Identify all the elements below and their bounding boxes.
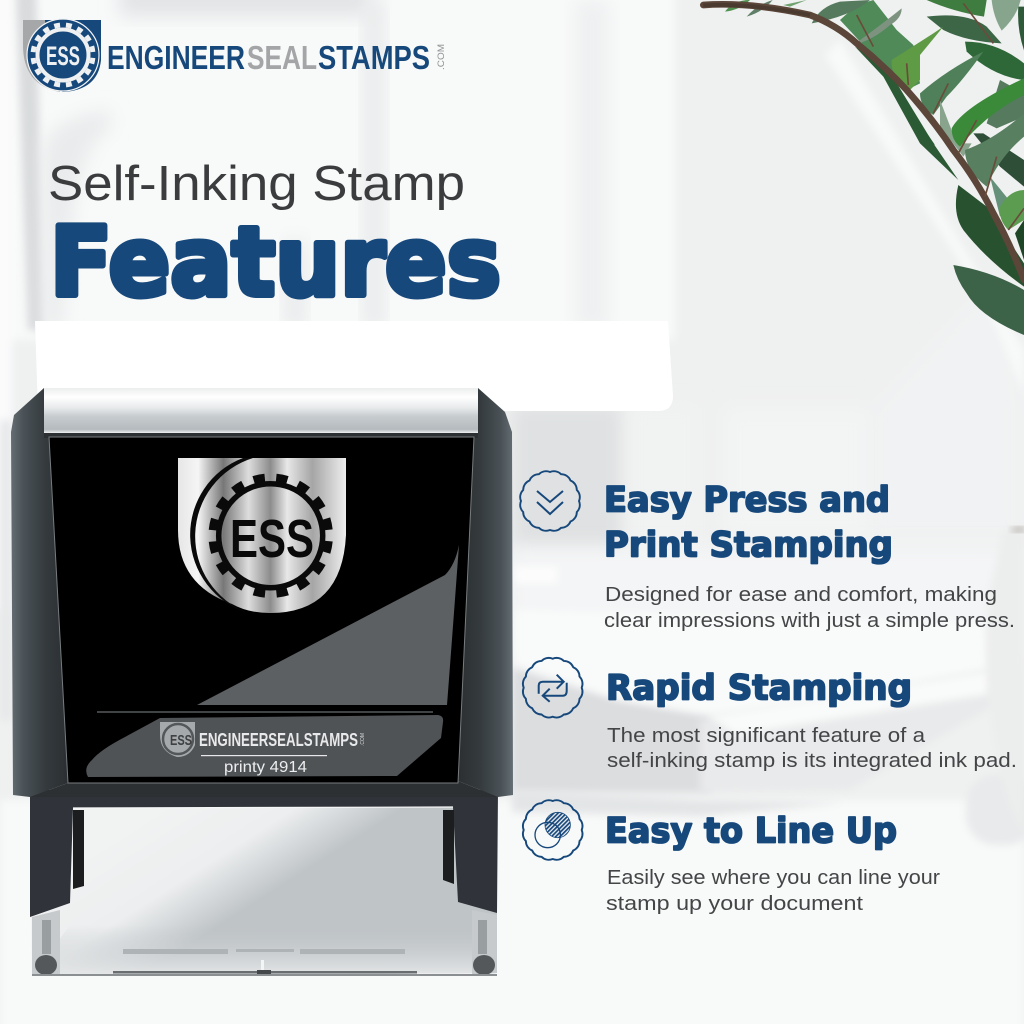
small brand label — [160, 722, 366, 776]
description: The most significant feature of a — [607, 725, 926, 747]
logo shield — [23, 19, 101, 92]
logo: Engineer Seal Stamps — [23, 19, 446, 92]
small brand label: printy 4914 — [224, 759, 307, 776]
logo wordmark — [107, 39, 446, 76]
description: Easily see where you can line your — [607, 867, 940, 889]
clear stamp base — [30, 800, 497, 976]
icon: double chevron — [520, 471, 580, 531]
description — [607, 725, 1017, 772]
grey housing shell — [11, 388, 513, 797]
heading: Easy to Line Up — [605, 812, 897, 852]
description: clear impressions with just a simple press. — [604, 610, 1015, 632]
feature: Easy Press and Print Stamping — [520, 471, 1015, 632]
silver top strip — [44, 388, 478, 433]
small brand label: ENGINEERSEALSTAMPS — [199, 730, 358, 750]
heading: Rapid Stamping — [606, 668, 912, 708]
white monitor panel — [35, 321, 673, 411]
description: stamp up your document — [606, 893, 864, 915]
panel reflection lower — [86, 715, 443, 777]
logo shield: ESS — [46, 41, 80, 71]
feature: Rapid Stamping — [523, 658, 1017, 772]
logo wordmark: SEAL — [247, 39, 317, 76]
heading line two: Print Stamping — [604, 526, 893, 566]
icon: repeat arrows — [523, 658, 583, 718]
title line: Features: Features — [50, 208, 501, 318]
plant with green leaves — [703, 0, 1024, 335]
panel reflection upper — [197, 545, 459, 705]
heading: Easy Press and — [604, 480, 890, 520]
small brand label: ESS — [170, 732, 192, 749]
description — [604, 584, 1015, 632]
dark plunger frame — [30, 790, 498, 917]
logo wordmark: .COM — [436, 44, 446, 70]
small brand label: .COM — [360, 733, 366, 746]
logo wordmark: ENGINEER — [107, 39, 245, 76]
description: Designed for ease and comfort, making — [605, 584, 997, 606]
glossy black panel — [49, 437, 474, 783]
icon: overlapping circles — [523, 800, 583, 860]
metallic ESS shield logo — [178, 458, 346, 613]
title — [48, 157, 501, 318]
logo wordmark: STAMPS — [318, 39, 430, 76]
description: self-inking stamp is its integrated ink pad. — [607, 750, 1017, 772]
description — [606, 867, 940, 915]
title line: Self-Inking Stamp: Self-Inking Stamp — [48, 157, 465, 211]
self-inking stamp product — [11, 388, 513, 976]
metallic ESS shield logo: ESS — [230, 509, 314, 569]
feature: Easy to Line Up — [523, 800, 940, 915]
